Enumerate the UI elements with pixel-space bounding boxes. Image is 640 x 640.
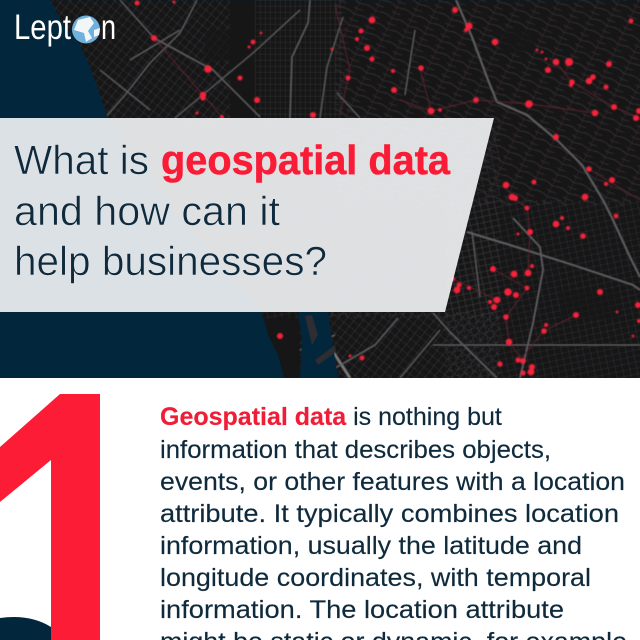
body text: attribute. It typically combines location: [160, 500, 619, 528]
logo: Lepton with globe: n: [101, 8, 116, 47]
red data points: [134, 0, 640, 376]
title text: and how can it: [14, 188, 281, 234]
logo: Lepton with globe: [14, 8, 116, 47]
body text: [160, 403, 627, 640]
title text: geospatial data: [161, 137, 451, 183]
body text: information. The location attribute: [160, 596, 564, 624]
body text: Geospatial data is nothing but: [160, 403, 502, 431]
logo: Lepton with globe: Lept: [14, 8, 71, 47]
map background: [0, 0, 640, 378]
body text: information that describes objects,: [160, 436, 551, 464]
body text: information, usually the latitude and: [160, 532, 582, 560]
icon: globe: [72, 16, 100, 44]
title text: [14, 137, 451, 284]
title text: help businesses?: [14, 238, 327, 284]
title panel: [0, 118, 494, 312]
bay piers: [305, 315, 336, 365]
body text: events, or other features with a location: [160, 468, 625, 496]
numeral 1: [0, 394, 100, 640]
title text: What is: [14, 137, 149, 183]
body text: longitude coordinates, with temporal: [160, 564, 591, 592]
